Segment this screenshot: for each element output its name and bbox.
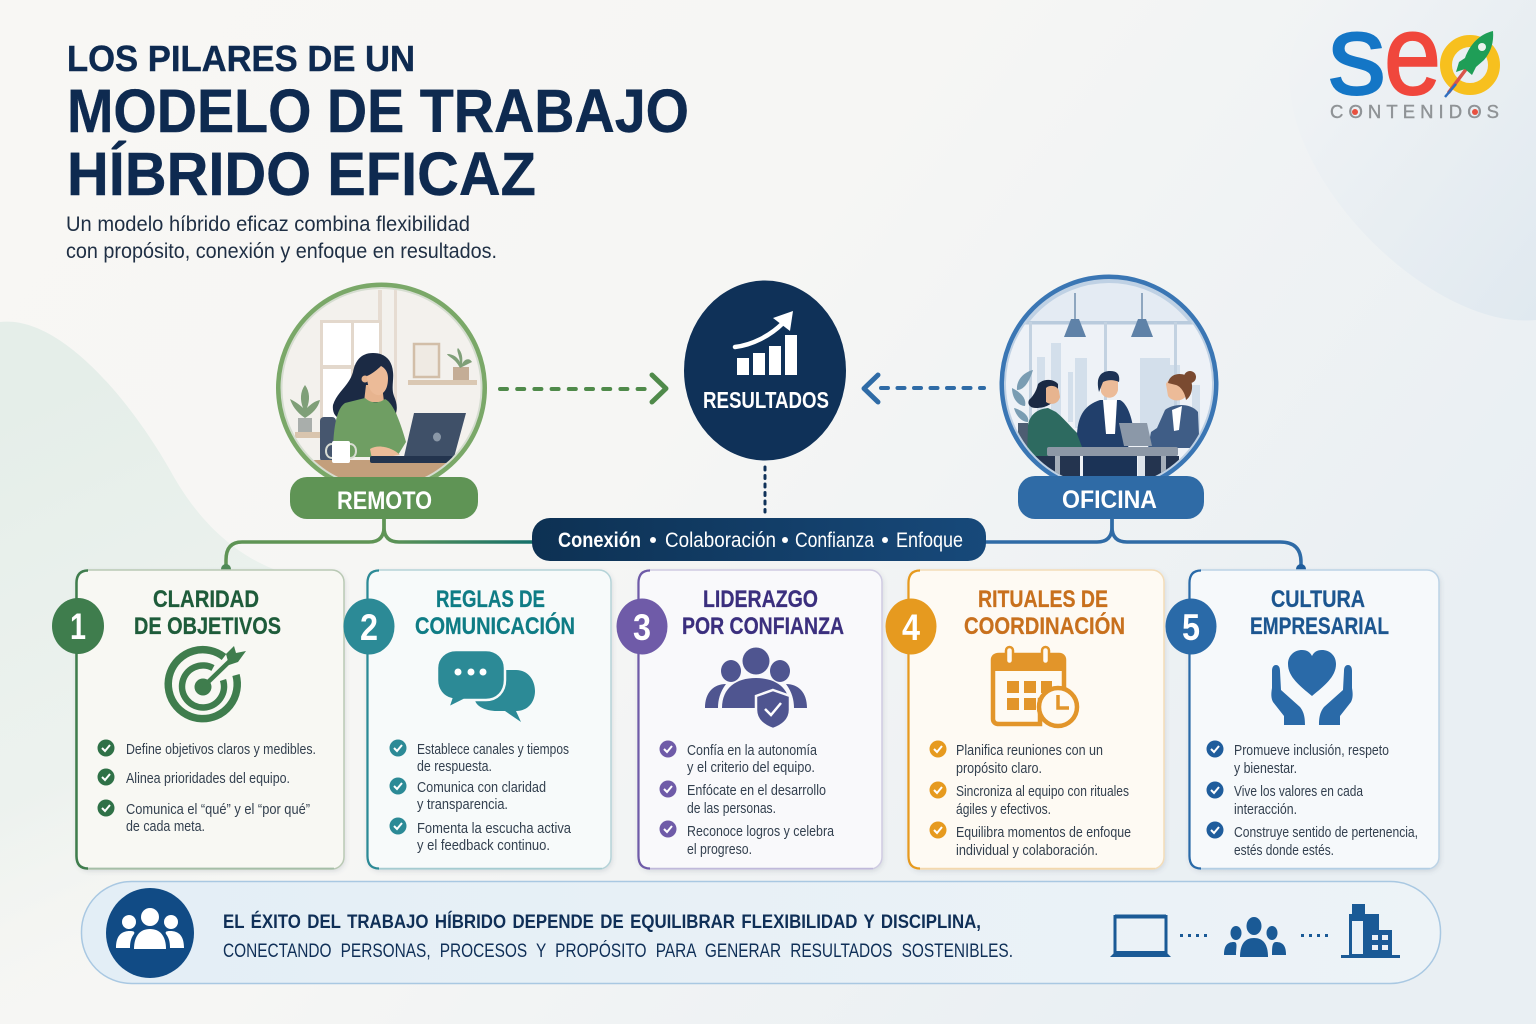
bullet list: de las personas.	[687, 800, 776, 817]
oficina illustration	[1000, 277, 1220, 492]
bullet list: de respuesta.	[417, 758, 492, 775]
number 5: 5	[1182, 607, 1200, 648]
heading	[415, 586, 575, 640]
logo: SEO Contenidos: CONTENIDOS	[1330, 101, 1499, 122]
label: remoto	[290, 477, 478, 519]
values pill: Colaboración	[665, 529, 776, 552]
bullet list: Alinea prioridades del equipo.	[126, 770, 290, 787]
icon: team circle	[106, 888, 194, 978]
message: CONECTANDO PERSONAS, PROCESOS Y PROPÓSITO PARA GENERAR RESULTADOS SOSTENIBLES.	[223, 940, 1013, 962]
dots	[1301, 934, 1333, 937]
label: oficina	[1018, 476, 1204, 519]
arrow: remoto to resultados	[500, 375, 666, 402]
bullet list: estés donde estés.	[1234, 842, 1334, 859]
title: MODELO DE TRABAJO	[67, 77, 689, 145]
results circle: RESULTADOS	[703, 387, 829, 413]
bullet list: propósito claro.	[956, 760, 1042, 777]
panel 1: claridad de objetivos	[52, 570, 344, 869]
values pill: Conexión	[558, 529, 641, 552]
bullet list: Sincroniza al equipo con rituales	[956, 783, 1129, 800]
title: LOS PILARES DE UN	[67, 38, 415, 79]
title	[67, 38, 689, 208]
heading: REGLAS DE	[436, 586, 545, 613]
message	[223, 910, 1013, 962]
bullet list: individual y colaboración.	[956, 842, 1098, 859]
bullet list: Construye sentido de pertenencia,	[1234, 824, 1418, 841]
panel 4: rituales de coordinación	[886, 570, 1164, 869]
bullet list: Comunica el “qué” y el “por qué”	[126, 801, 310, 818]
bullet list: ágiles y efectivos.	[956, 801, 1051, 818]
values pill	[532, 518, 986, 561]
bullet list: de cada meta.	[126, 818, 205, 835]
bullet list: interacción.	[1234, 801, 1297, 818]
bullet list: Planifica reuniones con un	[956, 742, 1103, 759]
bullet list: y transparencia.	[417, 796, 508, 813]
heading: CULTURA	[1271, 586, 1365, 613]
icon: building	[1341, 904, 1400, 958]
heading	[1250, 586, 1389, 640]
bullet list: Vive los valores en cada	[1234, 783, 1364, 800]
dots	[1180, 934, 1210, 937]
values pill: Enfoque	[896, 529, 963, 552]
subtitle: con propósito, conexión y enfoque en resultados.	[66, 240, 497, 263]
bullet list: Define objetivos claros y medibles.	[126, 741, 316, 758]
number 5	[1166, 598, 1216, 654]
bottom banner	[82, 882, 1440, 984]
bullet list	[390, 740, 572, 854]
bullet list	[930, 740, 1131, 859]
icon: team	[1224, 917, 1286, 957]
bullet list: Equilibra momentos de enfoque	[956, 824, 1131, 841]
number 1	[52, 598, 104, 654]
bullet list	[98, 740, 316, 835]
bullet list: y bienestar.	[1234, 760, 1297, 777]
dotted connector: resultados to values	[764, 467, 766, 512]
bullet list: el progreso.	[687, 841, 752, 858]
icon: chat bubbles	[437, 650, 535, 722]
bullet list: Establece canales y tiempos	[417, 741, 569, 758]
heading: LIDERAZGO	[703, 586, 818, 613]
heading: COMUNICACIÓN	[415, 612, 575, 640]
number 1: 1	[70, 606, 86, 647]
bullet list: Confía en la autonomía	[687, 742, 818, 759]
panel 3: liderazgo por confianza	[616, 570, 882, 869]
heading	[964, 586, 1125, 640]
bullet list	[660, 740, 835, 858]
subtitle: Un modelo híbrido eficaz combina flexibilidad	[66, 213, 470, 236]
bullet list: y el criterio del equipo.	[687, 759, 815, 776]
number 4	[886, 598, 936, 654]
label: oficina: OFICINA	[1062, 486, 1157, 514]
icon: laptop	[1110, 916, 1171, 957]
heading: POR CONFIANZA	[682, 613, 844, 640]
subtitle	[66, 213, 497, 263]
icon: target	[168, 646, 246, 719]
number 3	[616, 598, 668, 654]
icon: team with shield	[705, 648, 807, 729]
panel 5: cultura empresarial	[1166, 570, 1439, 869]
label: remoto: REMOTO	[337, 487, 432, 515]
icon: hands holding heart	[1271, 650, 1353, 725]
bullet list: Comunica con claridad	[417, 779, 546, 796]
icon: calendar with clock	[993, 647, 1077, 726]
bullet list: Enfócate en el desarrollo	[687, 782, 826, 799]
number 3: 3	[633, 607, 651, 648]
heading: EMPRESARIAL	[1250, 613, 1389, 640]
number 2: 2	[360, 607, 378, 648]
bullet list: Reconoce logros y celebra	[687, 823, 835, 840]
heading: RITUALES DE	[978, 586, 1108, 613]
heading: DE OBJETIVOS	[134, 613, 281, 640]
number 2	[344, 598, 394, 654]
remoto illustration	[278, 285, 485, 500]
connector: oficina branches	[984, 519, 1306, 574]
bullet list: Fomenta la escucha activa	[417, 820, 572, 837]
bullet list: Promueve inclusión, respeto	[1234, 742, 1389, 759]
number 4: 4	[902, 607, 920, 648]
logo: SEO Contenidos	[1328, 0, 1499, 122]
values pill: Confianza	[795, 529, 874, 552]
message: EL ÉXITO DEL TRABAJO HÍBRIDO DEPENDE DE EQUILIBRAR FLEXIBILIDAD Y DISCIPLINA,	[223, 910, 981, 933]
bullet list	[1206, 740, 1418, 859]
heading: CLARIDAD	[153, 586, 259, 613]
results circle	[684, 280, 846, 460]
heading	[682, 586, 844, 640]
bullet list: y el feedback continuo.	[417, 837, 550, 854]
connector: remoto branches	[221, 519, 534, 574]
heading: COORDINACIÓN	[964, 612, 1125, 640]
arrow: oficina to resultados	[864, 375, 984, 402]
panel 2: reglas de comunicación	[344, 570, 611, 869]
title: HÍBRIDO EFICAZ	[67, 140, 536, 208]
heading	[134, 586, 281, 640]
